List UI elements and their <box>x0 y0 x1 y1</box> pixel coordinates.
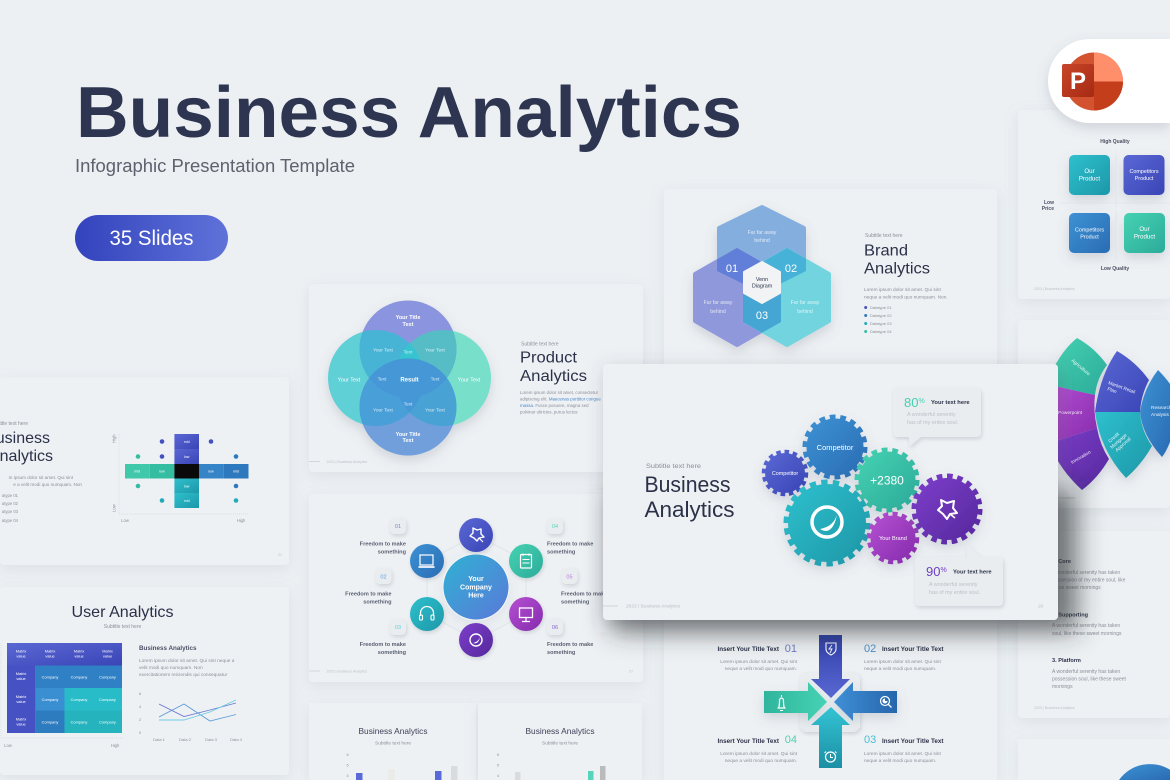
list item: core: 1. Core <box>1052 559 1071 565</box>
quadrant: competitors product indigo: Product <box>1135 176 1154 182</box>
hub labels: something <box>547 650 576 656</box>
text: item 04: neque a velit modi quo numquam. <box>725 758 797 764</box>
panel: brand analytics slide <box>690 205 948 353</box>
chart: cross matrix: mid <box>134 470 140 474</box>
fan labels: Innovation <box>1070 449 1092 466</box>
chart: company matrix: value <box>103 654 112 658</box>
chart: line chart: Data 3 <box>205 737 218 742</box>
gear: purple with star icon <box>914 476 980 542</box>
venn labels: Text <box>403 438 414 444</box>
chart: hexagon venn diagram: behind <box>754 238 770 244</box>
text block: brand analytics: Subtitle text here <box>865 233 903 239</box>
panel: bar chart slide right <box>478 703 642 780</box>
panel: bar chart slide right: Subtitle text here <box>542 740 578 746</box>
text: item 02 <box>864 643 944 672</box>
text block: brand analytics <box>864 233 948 334</box>
chart: company matrix: Company <box>71 720 87 724</box>
chart: cross matrix <box>112 434 249 523</box>
panel: quality matrix slide: High Quality <box>1100 139 1130 145</box>
text: item 01: Lorem ipsum dolor sit amet. Qui sint <box>720 659 798 665</box>
text block: product analytics: massa. Fusce posuere, magna sed <box>520 403 589 408</box>
chart: company matrix: Matrix <box>102 648 113 654</box>
hub labels: something <box>547 550 576 556</box>
footer: featured slide: 2023 | Business Analytics <box>626 604 681 610</box>
venn labels: Your Text <box>373 408 394 414</box>
panel: bar chart slide left: 4 <box>346 774 349 778</box>
arrow: right <box>834 682 897 721</box>
icon: headphones node <box>410 597 444 631</box>
text block: business analytics: Lorem ipsum dolor sit amet. Qui sint neque a <box>139 658 235 664</box>
callout: 90% <box>915 545 1003 606</box>
hub labels: Freedom to make <box>547 642 593 648</box>
chart: hexagon venn diagram: Far far away <box>791 300 820 306</box>
quadrant: our product green: Product <box>1134 234 1155 240</box>
list item: supporting: A wonderful serenity has taken <box>1052 623 1120 629</box>
text block: brand analytics: Analytics <box>864 260 930 278</box>
footer: product slide: 2023 | Business Analytics <box>326 460 367 464</box>
callout: 90%: % <box>940 567 947 574</box>
footer: hub slide: 27 <box>629 670 633 674</box>
chart: company matrix: value <box>16 654 26 658</box>
panel: arrow cross slide <box>664 600 997 780</box>
chart: cross matrix: low <box>184 484 190 488</box>
chart: company matrix: Low <box>4 743 13 748</box>
badges: numbers and labels: 03 <box>395 625 401 631</box>
quadrant: our product green: Our <box>1139 226 1150 233</box>
text: item 04: Insert Your Title Text <box>718 738 780 745</box>
chart: hexagon venn diagram: 01 <box>726 263 738 275</box>
text block: brand analytics: Datatype 03 <box>870 321 892 326</box>
venn labels: Your Title <box>396 432 420 438</box>
chart: company matrix: Company <box>42 674 58 680</box>
panel: stack list slide <box>1018 531 1170 718</box>
venn labels: Result <box>400 378 419 384</box>
text block: product analytics: Subtitle text here <box>521 342 559 348</box>
quadrant: competitors product blue: Product <box>1080 234 1099 240</box>
venn labels: Your Text <box>338 378 361 384</box>
chart: cross matrix: low <box>208 470 214 474</box>
callout: 80%: % <box>918 398 925 405</box>
list item: core: these sweet mornings <box>1052 585 1101 591</box>
chart: hexagon venn diagram: behind <box>797 309 813 315</box>
chart: company matrix: value <box>16 676 26 681</box>
chart: company matrix: Company <box>99 697 116 702</box>
chart: line chart: Data 4 <box>230 737 243 742</box>
text block: business analytics: exercitationem reiciendis qui consequatur <box>139 672 228 678</box>
panel: product analytics slide <box>314 300 603 476</box>
subtitle: Infographic Presentation Template <box>75 155 355 176</box>
chart: hexagon venn diagram: Venn <box>756 277 768 283</box>
badges: numbers and labels: 06 <box>552 625 558 631</box>
chart: cross matrix: High <box>237 518 246 523</box>
text block: business analytics: velit modi quo numquam. Non <box>139 665 203 671</box>
list item: platform: mornings <box>1052 684 1073 690</box>
heading: business analytics featured <box>644 463 734 522</box>
badge: 35 slides: 35 Slides <box>110 227 194 250</box>
heading: business analytics left: m ipsum dolor sit amet. Qui sint <box>9 475 74 480</box>
panel: bar chart slide right: 6 <box>497 753 499 757</box>
hub labels: Freedom to make <box>561 592 607 598</box>
text block: brand analytics: Datatype 01 <box>870 305 892 310</box>
gear: +2380: +2380 <box>870 474 904 488</box>
gear: big competitor <box>805 417 865 477</box>
chart: line chart <box>139 691 243 742</box>
hub labels: Freedom to make <box>547 542 593 548</box>
callout: 90%: A wonderful serenity <box>929 582 978 588</box>
arrow: left <box>764 682 827 721</box>
venn labels: Text <box>404 350 413 356</box>
chart: company matrix: Company <box>71 674 87 680</box>
gear: small competitor: Competitor <box>772 471 798 477</box>
chart: hexagon venn diagram: Far far away <box>748 230 777 236</box>
panel: fan diagram slide: 2023 | Business Analytics <box>1034 496 1075 500</box>
quadrant: competitors product blue: Competitors <box>1075 228 1104 234</box>
callout: 80%: A wonderful serenity <box>907 412 956 418</box>
chart: company matrix: Company <box>71 697 87 702</box>
text block: product analytics <box>520 342 601 414</box>
text block: product analytics: Product <box>520 350 578 366</box>
footer: featured slide <box>603 604 1044 610</box>
chart: cross matrix: low <box>159 470 165 474</box>
chart: company matrix: High <box>111 743 120 748</box>
main title: Business Analytics <box>76 73 742 153</box>
heading: business analytics left: atype 01 <box>2 493 19 498</box>
gear: your brand <box>869 514 917 562</box>
heading: business analytics left: atype 04 <box>2 518 19 523</box>
heading: business analytics featured: Analytics <box>644 497 734 522</box>
gear: +2380 <box>857 450 917 510</box>
gear: small competitor <box>764 452 806 494</box>
quadrant: our product teal <box>1069 155 1110 195</box>
chart: fan segments <box>1050 338 1170 490</box>
chart: company matrix: Company <box>42 697 58 702</box>
panel: bar chart slide left <box>309 703 476 780</box>
text: item 03 <box>864 734 944 764</box>
chart: line chart: 2 <box>139 717 142 722</box>
hub labels: Freedom to make <box>360 542 406 548</box>
panel: bar chart slide left: Business Analytics <box>358 726 428 736</box>
list item: platform: possession soul, like these sweet <box>1052 676 1127 682</box>
chart: cross matrix: mid <box>233 470 239 474</box>
icon: moon node <box>459 623 493 657</box>
panel: bar chart slide right: 4 <box>497 774 499 778</box>
gear: big competitor: Competitor <box>817 443 854 452</box>
heading: business analytics left: atype 03 <box>2 509 19 514</box>
panel: bar chart slide right: 5 <box>497 764 499 768</box>
text: item 03: neque a velit modi quo numquam. <box>864 758 936 764</box>
gear: your brand: Your Brand <box>879 536 907 542</box>
badges: numbers and labels <box>376 518 578 635</box>
heading: business analytics featured: Business <box>644 472 730 497</box>
list item: core: possession of my entire soul, like <box>1052 578 1126 584</box>
heavy cast shadow of featured slide <box>612 490 1078 632</box>
text block: product analytics: pulvinar ultricies, purus lectus <box>520 410 578 414</box>
venn labels: Your Text <box>425 348 446 354</box>
panel: fan diagram slide <box>1018 320 1170 508</box>
icon: monitor node <box>509 597 543 631</box>
heading: business analytics left: atype 02 <box>2 501 19 506</box>
badges: numbers and labels: 01 <box>395 524 401 530</box>
text block: business analytics: Business Analytics <box>139 645 197 652</box>
chart: hexagon venn diagram <box>693 207 831 347</box>
panel: stack list slide: 2023 | Business Analytics <box>1034 706 1075 710</box>
chart: cross matrix: Low <box>121 518 130 523</box>
panel: quality matrix slide: Low <box>1044 200 1054 206</box>
hub center: your company here <box>442 554 510 620</box>
panel: matrix cross slide <box>0 377 289 565</box>
text: item 02: Lorem ipsum dolor sit amet. Qui sint <box>864 659 941 665</box>
fan labels: Market Retail <box>1107 380 1136 396</box>
panel: quality matrix slide: Low Quality <box>1101 266 1129 272</box>
hub center: your company here: Here <box>468 592 484 600</box>
panel: matrix cross slide: 21 <box>278 553 282 557</box>
chart: hexagon venn diagram: Diagram <box>752 284 773 290</box>
text: item 01 <box>718 643 798 672</box>
chart: company matrix: value <box>74 654 84 658</box>
chart: hexagon venn diagram: 03 <box>756 310 768 322</box>
arrow: bottom <box>811 707 850 768</box>
panel: quality matrix slide <box>1018 110 1170 299</box>
callout: 90%: 90 <box>926 564 940 579</box>
icon: powerpoint logo: P <box>1070 68 1086 95</box>
text block: product analytics: adipiscing elit. Maecenas porttitor congue <box>520 396 601 402</box>
venn labels: Text <box>404 402 413 408</box>
list item: core: A wonderful serenity has taken <box>1052 570 1120 576</box>
text: item 01: 01 <box>785 643 797 655</box>
quadrant: our product teal: Our <box>1084 168 1095 175</box>
subtitle: user analytics: Subtitle text here <box>104 624 141 630</box>
venn labels: Text <box>403 322 414 328</box>
text: item 03: Insert Your Title Text <box>882 738 944 745</box>
heading: business analytics featured: Subtitle text here <box>646 463 701 470</box>
hub center: your company here: Your <box>468 576 484 583</box>
icon: laptop node <box>410 544 444 578</box>
chart: line chart: 6 <box>139 691 142 696</box>
badges: numbers and labels: 04 <box>552 524 558 530</box>
hub labels: Freedom to make <box>360 642 406 648</box>
heading: business analytics left <box>0 421 82 523</box>
list item: core <box>1052 559 1126 591</box>
footer: product slide <box>309 460 367 464</box>
chart: company matrix: value <box>16 699 26 704</box>
text block: product analytics: Lorem ipsum dolor sit amet, consectetur <box>520 390 599 395</box>
badges: numbers and labels: 02 <box>380 574 387 580</box>
text block: brand analytics: Datatype 04 <box>870 329 892 334</box>
quadrant: our product teal: Product <box>1079 176 1100 182</box>
fan labels: Agriculture <box>1070 358 1091 377</box>
chart: hexagon venn diagram: behind <box>710 309 726 315</box>
chart: company matrix: Matrix <box>16 671 26 676</box>
callout: 90%: has of my entire soul. <box>929 590 980 596</box>
text block: product analytics: Analytics <box>520 368 587 385</box>
hub labels: something <box>561 600 590 606</box>
list item: supporting: soul, like these sweet mornings <box>1052 631 1122 637</box>
venn labels: Your Title <box>396 315 420 321</box>
chart: line chart: 0 <box>139 730 142 735</box>
text block: brand analytics: Brand <box>864 242 908 260</box>
heading: user analytics: User Analytics <box>72 604 174 621</box>
chart: cross matrix: High <box>112 434 116 443</box>
chart: company matrix: Company <box>99 720 116 724</box>
heading: business analytics left: e a velit modi quo numquam. Non <box>13 482 82 487</box>
chart: cross matrix: low <box>184 455 190 459</box>
panel: partial slide bottom right <box>1018 739 1170 780</box>
text block: brand analytics: Lorem ipsum dolor sit amet. Qui sint <box>864 287 941 293</box>
text: item 04: 04 <box>785 734 797 746</box>
gear: large teal with moon icon <box>786 482 868 564</box>
chart: cross matrix: mid <box>184 440 190 444</box>
fan labels: Plan <box>1106 386 1118 395</box>
icon: clipboard node <box>509 544 543 578</box>
text block: brand analytics: Datatype 02 <box>870 313 892 318</box>
text block: business analytics <box>139 645 235 678</box>
text: item 01: neque a velit modi quo numquam. <box>725 666 797 672</box>
quadrant: competitors product blue <box>1069 213 1110 253</box>
chart: company matrix: value <box>16 722 26 726</box>
chart: four circle venn diagram <box>328 300 491 456</box>
fan labels: Powerpoint <box>1058 410 1083 416</box>
chart: company matrix: Matrix <box>45 648 55 654</box>
chart: line chart: 4 <box>139 704 142 709</box>
callout: 80%: has of my entire soul. <box>907 420 958 426</box>
text: item 04: Lorem ipsum dolor sit amet. Qui sint <box>720 751 798 757</box>
chart: line chart: Data 1 <box>153 737 166 742</box>
hub labels: Freedom to make <box>345 592 392 598</box>
venn labels <box>338 315 481 444</box>
chart: company matrix: Matrix <box>16 648 26 654</box>
callout: 90%: Your text here <box>953 570 992 576</box>
hub labels <box>345 542 607 656</box>
text: item 02: Insert Your Title Text <box>882 646 944 653</box>
text: item 02: 02 <box>864 643 876 655</box>
callout: 80%: Your text here <box>931 400 970 406</box>
text: item 03: 03 <box>864 734 876 746</box>
footer: hub slide <box>309 670 633 674</box>
text: item 03: Lorem ipsum dolor sit amet. Qui sint <box>864 751 941 757</box>
chart: hexagon venn diagram: 02 <box>785 263 797 275</box>
hub labels: something <box>378 650 407 656</box>
panel: quality matrix slide: 2023 | Business Analytics <box>1034 287 1075 291</box>
panel: bar chart slide right: Business Analytics <box>526 726 594 736</box>
venn labels: Your Text <box>425 408 446 414</box>
text: item 04 <box>718 734 798 764</box>
quadrant: competitors product indigo <box>1124 155 1164 195</box>
quadrant: competitors product indigo: Competitors <box>1129 169 1159 175</box>
badge: powerpoint <box>1048 39 1170 123</box>
text: item 01: Insert Your Title Text <box>718 646 780 653</box>
hub labels: something <box>378 550 407 556</box>
chart: company matrix: value <box>45 654 55 658</box>
badges: numbers and labels: 05 <box>566 574 573 580</box>
panel: quality matrix slide: Price <box>1042 206 1054 212</box>
venn labels: Text <box>378 376 387 382</box>
chart: company matrix: Matrix <box>16 716 26 722</box>
chart: hexagon venn diagram: Far far away <box>704 300 733 306</box>
fan labels: Credit <box>1107 431 1121 444</box>
hub center: your company here: Company <box>460 584 492 592</box>
venn labels: Your Text <box>373 348 394 354</box>
panel: user analytics slide <box>0 587 289 775</box>
panel: bar chart slide left: 6 <box>346 753 349 757</box>
text block: brand analytics: neque a velit modi quo numquam. Non. <box>864 294 948 300</box>
hub labels: something <box>363 600 392 606</box>
arrow: top <box>811 635 850 698</box>
list item: platform: A wonderful serenity has taken <box>1052 669 1120 675</box>
chart: company matrix: Matrix <box>74 648 84 654</box>
panel: company hub slide <box>309 494 643 682</box>
cross backing tile <box>800 672 860 732</box>
panel: bar chart slide left: Subtitle text here <box>375 740 411 746</box>
chart: company matrix: Company <box>42 720 58 724</box>
footer: featured slide: 20 <box>1038 604 1044 610</box>
callout: 80% <box>893 388 981 447</box>
fan labels: Mortgage <box>1109 432 1129 450</box>
text: item 02: neque a velit modi quo numquam. <box>864 666 936 672</box>
list item: supporting <box>1052 612 1122 637</box>
fan labels: Approval <box>1114 436 1132 453</box>
list item: platform: 3. Platform <box>1052 658 1081 664</box>
chart: company matrix: Company <box>99 674 116 680</box>
hub connector ring <box>427 535 526 640</box>
list item: supporting: 2. Supporting <box>1052 612 1089 618</box>
callout: 80%: 80 <box>904 395 918 410</box>
fan labels: Analysis <box>1151 412 1169 418</box>
list item: platform <box>1052 658 1127 690</box>
venn labels: Text <box>431 376 440 382</box>
icon: magic star node <box>459 518 493 552</box>
chart: cross matrix: mid <box>184 499 190 503</box>
heading: business analytics left: nalytics <box>0 448 53 465</box>
chart: line chart: Data 2 <box>179 737 192 742</box>
chart: company matrix <box>1 643 123 748</box>
panel: gears slide featured <box>603 364 1058 620</box>
venn labels: Your Text <box>458 378 481 384</box>
quadrant: our product green <box>1124 213 1165 253</box>
fan labels <box>1058 358 1170 466</box>
panel: bar chart slide left: 5 <box>346 764 349 768</box>
chart: cross matrix: Low <box>112 503 116 512</box>
chart: company matrix: Matrix <box>16 694 26 699</box>
footer: hub slide: 2023 | Business Analytics <box>326 670 367 674</box>
badge: 35 slides <box>75 215 228 261</box>
